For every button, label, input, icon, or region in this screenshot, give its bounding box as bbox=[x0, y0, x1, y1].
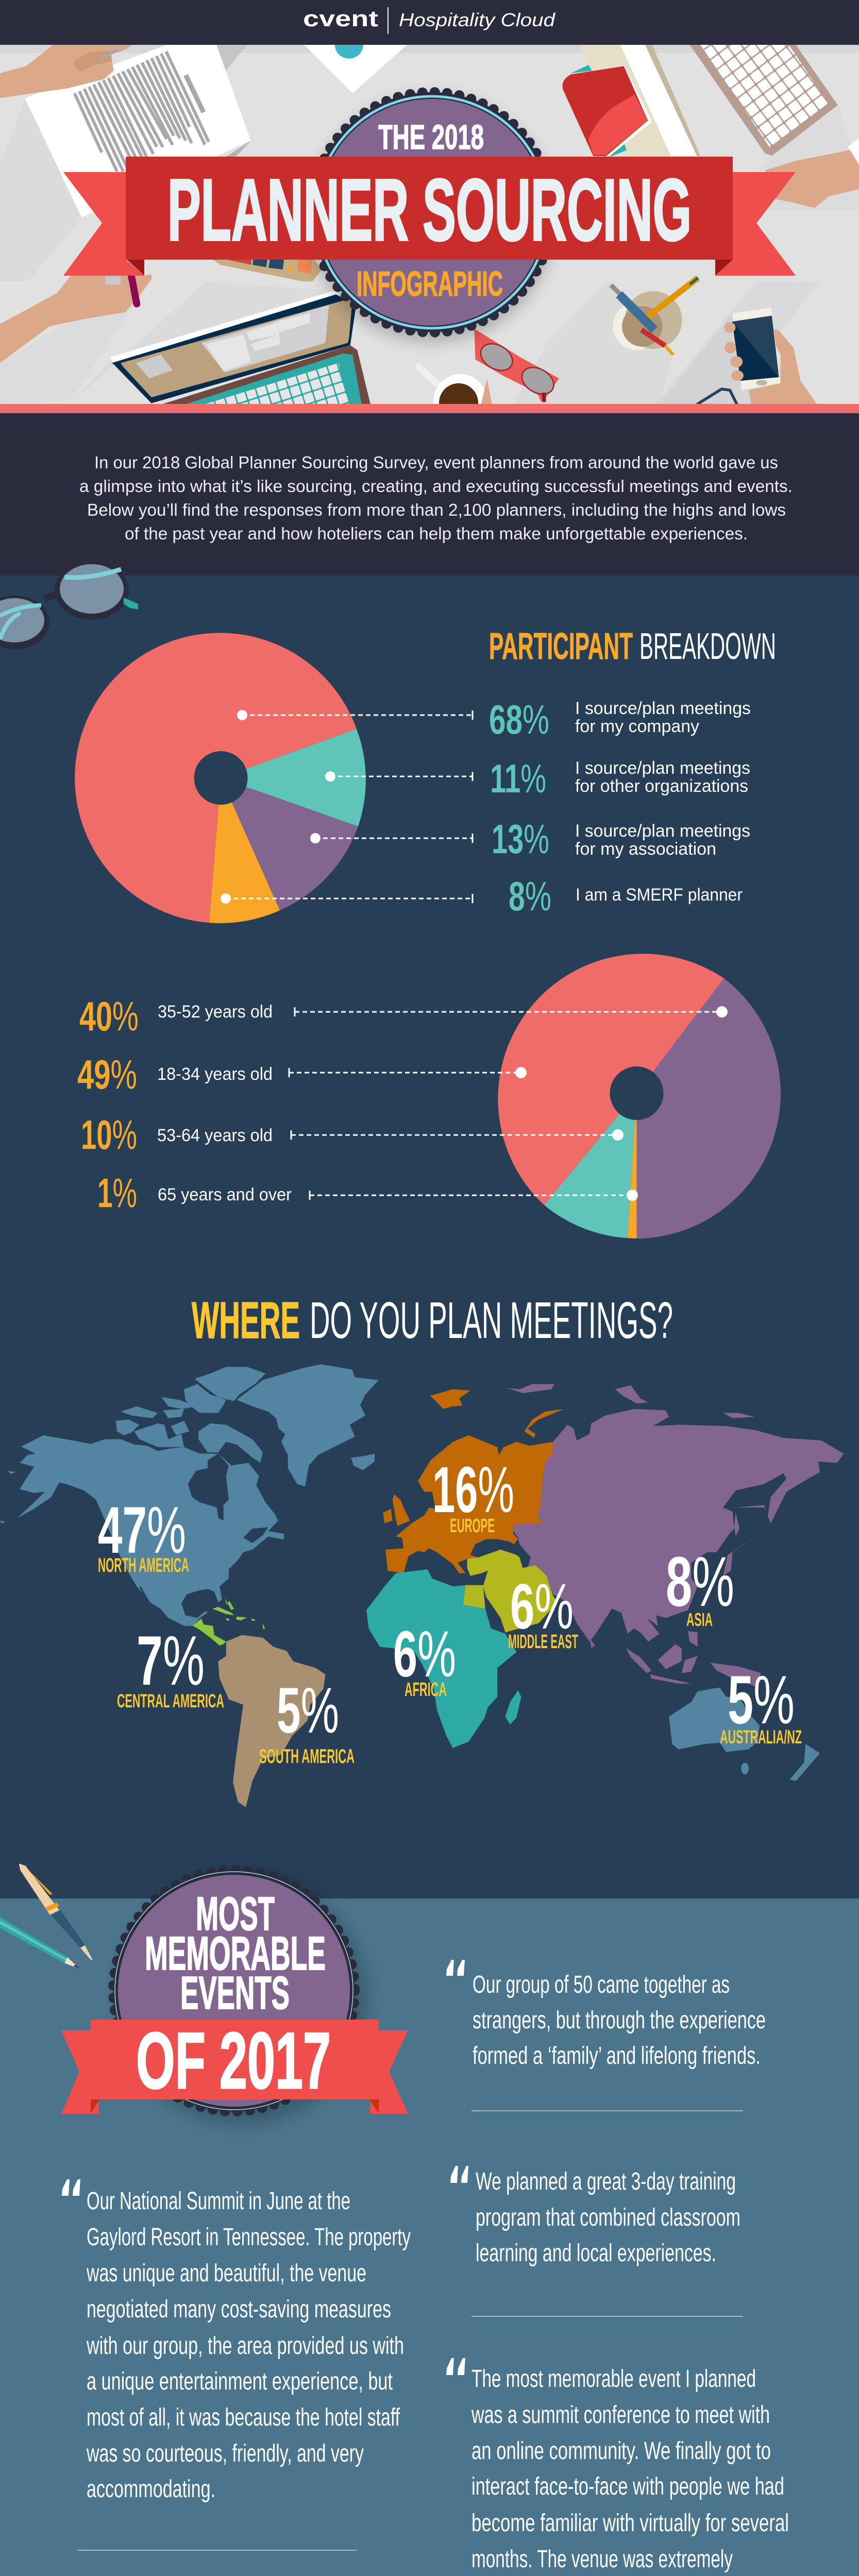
title ribbon bbox=[63, 157, 796, 276]
intro panel: Below you’ll find the responses from more than 2,100 planners, including the highs and lows bbox=[87, 500, 786, 519]
label: africa: AFRICA bbox=[405, 1679, 447, 1701]
region: africa bbox=[366, 1569, 521, 1748]
callout: 68 percent: for my company bbox=[575, 717, 699, 736]
callout: 13 percent bbox=[310, 816, 750, 862]
quote: national summit bbox=[62, 2179, 411, 2503]
badge: most memorable events of 2017: MEMORABLE bbox=[145, 1927, 326, 1980]
quote: national summit: Our National Summit in June at the bbox=[87, 2188, 350, 2215]
quotes section background bbox=[0, 1899, 859, 2576]
right desk items bbox=[474, 45, 859, 404]
label: middle east: 6% bbox=[510, 1571, 574, 1642]
quote: summit conference bbox=[446, 2358, 789, 2576]
label: australia and nz: 5% bbox=[728, 1662, 795, 1738]
label: central america: CENTRAL AMERICA bbox=[117, 1690, 224, 1711]
icon: pen and pencil bbox=[0, 1863, 93, 1969]
callout: 1 percent bbox=[97, 1170, 638, 1216]
quote: national summit: most of all, it was because the hotel staff bbox=[87, 2404, 400, 2431]
label: australia and nz: AUSTRALIA/NZ bbox=[720, 1726, 802, 1748]
divider bbox=[471, 2110, 743, 2111]
intro panel: a glimpse into what it’s like sourcing, creating, and executing successful meetings and events. bbox=[79, 477, 793, 496]
callout: 40 percent bbox=[79, 993, 728, 1039]
world map bbox=[0, 1364, 844, 1807]
region: europe bbox=[383, 1389, 564, 1573]
phone and hand bbox=[697, 308, 817, 404]
hero illustration desk scene bbox=[0, 45, 859, 404]
callout: 1 percent: 1% bbox=[97, 1170, 137, 1216]
region: middle east bbox=[463, 1550, 558, 1632]
quote: summit conference: months. The venue was extremely bbox=[471, 2546, 733, 2573]
label: asia: 8% bbox=[666, 1543, 734, 1621]
label: north america: 47% bbox=[98, 1494, 186, 1567]
badge: most memorable events of 2017: MOST bbox=[196, 1888, 275, 1940]
glasses red bbox=[474, 329, 559, 402]
intro panel: of the past year and how hoteliers can help them make unforgettable experiences. bbox=[125, 524, 748, 543]
top logo bar: cvent bbox=[303, 6, 378, 31]
callout: 40 percent: 40% bbox=[79, 993, 139, 1039]
heading: where do you plan meetings: WHERE bbox=[192, 1292, 300, 1349]
divider bbox=[471, 2316, 743, 2317]
heading: where do you plan meetings bbox=[192, 1292, 673, 1349]
callout: 10 percent: 10% bbox=[81, 1112, 137, 1158]
callout: 68 percent: I source/plan meetings bbox=[575, 699, 751, 718]
quote: national summit: with our group, the area provided us with bbox=[86, 2332, 404, 2360]
label: south america bbox=[259, 1675, 355, 1768]
callout: 1 percent: 65 years and over bbox=[158, 1185, 292, 1205]
pie chart: age bbox=[498, 954, 781, 1239]
callout: 11 percent: 11% bbox=[490, 756, 546, 801]
quote: national summit: a unique entertainment experience, but bbox=[87, 2368, 393, 2395]
quote: 3-day training: program that combined classroom bbox=[476, 2204, 740, 2231]
coffee mug bbox=[415, 364, 492, 404]
heading: participant breakdown: PARTICIPANT bbox=[489, 626, 633, 667]
coral divider strip bbox=[0, 404, 859, 413]
region: central america bbox=[193, 1598, 265, 1646]
divider bbox=[78, 2550, 357, 2551]
bays bbox=[188, 1454, 229, 1521]
badge: the 2018: THE 2018 bbox=[378, 118, 484, 157]
callout: 13 percent: for my association bbox=[575, 839, 716, 859]
callout: 10 percent bbox=[81, 1112, 624, 1158]
callout: 8 percent: I am a SMERF planner bbox=[576, 885, 743, 905]
callout: 11 percent bbox=[325, 756, 750, 801]
ribbon: of 2017 bbox=[61, 2016, 408, 2114]
label: south america: SOUTH AMERICA bbox=[259, 1745, 355, 1768]
label: south america: 5% bbox=[277, 1675, 339, 1747]
quote: national summit: was so courteous, friendly, and very bbox=[86, 2440, 364, 2467]
callout: 13 percent: 13% bbox=[492, 816, 549, 862]
callout: 49 percent: 49% bbox=[77, 1052, 137, 1097]
main dark section background bbox=[0, 575, 859, 1899]
quote: 3-day training: We planned a great 3-day training bbox=[476, 2168, 736, 2195]
callout: 8 percent bbox=[221, 873, 743, 919]
callout: 8 percent: 8% bbox=[509, 873, 551, 919]
region: south america bbox=[218, 1635, 326, 1807]
quote: national summit: accommodating. bbox=[87, 2476, 215, 2503]
label: north america: NORTH AMERICA bbox=[98, 1554, 189, 1577]
region: north america bbox=[0, 1364, 379, 1626]
callout: 11 percent: for other organizations bbox=[575, 776, 748, 796]
quote: group of 50: Our group of 50 came together as bbox=[473, 1971, 730, 1998]
top logo bar bbox=[0, 0, 859, 45]
callout: 68 percent: 68% bbox=[489, 697, 549, 742]
label: europe: 16% bbox=[432, 1453, 514, 1526]
region: australia and nz bbox=[669, 1688, 820, 1781]
quote: 3-day training: learning and local experiences. bbox=[476, 2240, 716, 2267]
callout: 49 percent bbox=[77, 1052, 527, 1097]
badge: the 2018: INFOGRAPHIC bbox=[357, 264, 503, 303]
callout: 40 percent: 35-52 years old bbox=[158, 1002, 273, 1022]
quote: national summit: Gaylord Resort in Tennessee. The property bbox=[87, 2224, 411, 2251]
map: eastern hemisphere bbox=[366, 1384, 844, 1781]
pen cup bbox=[611, 278, 698, 355]
ribbon: of 2017: OF 2017 bbox=[136, 2016, 331, 2105]
badge: most memorable events of 2017: EVENTS bbox=[180, 1968, 290, 2019]
label: asia: ASIA bbox=[686, 1609, 713, 1630]
label: europe: EUROPE bbox=[450, 1515, 495, 1537]
callout: 10 percent: 53-64 years old bbox=[157, 1126, 273, 1145]
callout: 49 percent: 18-34 years old bbox=[157, 1064, 273, 1084]
intro panel bbox=[0, 413, 859, 575]
quote: national summit: was unique and beautiful, the venue bbox=[86, 2260, 366, 2287]
callout: 68 percent bbox=[237, 697, 751, 742]
map: americas bbox=[0, 1364, 379, 1807]
badge: the 2018 bbox=[308, 92, 555, 343]
left desk items bbox=[0, 28, 407, 407]
callout: 13 percent: I source/plan meetings bbox=[575, 821, 750, 841]
quote: group of 50 bbox=[446, 1960, 766, 2070]
quote: national summit: negotiated many cost-saving measures bbox=[87, 2296, 391, 2323]
region: asia bbox=[507, 1384, 844, 1686]
label: central america: 7% bbox=[137, 1621, 205, 1700]
label: africa: 6% bbox=[393, 1618, 456, 1690]
callout: 11 percent: I source/plan meetings bbox=[575, 758, 750, 778]
label: africa bbox=[393, 1618, 456, 1701]
icon: glasses bbox=[0, 560, 138, 649]
laptop in hero bbox=[110, 290, 371, 407]
top logo bar: Hospitality Cloud bbox=[399, 9, 555, 30]
pie chart: participant role bbox=[75, 633, 366, 923]
intro panel: In our 2018 Global Planner Sourcing Survey, event planners from around the world gave us bbox=[94, 453, 778, 472]
badge: most memorable events of 2017 bbox=[61, 1870, 408, 2125]
quote: 3-day training bbox=[450, 2166, 740, 2267]
label: middle east: MIDDLE EAST bbox=[508, 1631, 578, 1653]
